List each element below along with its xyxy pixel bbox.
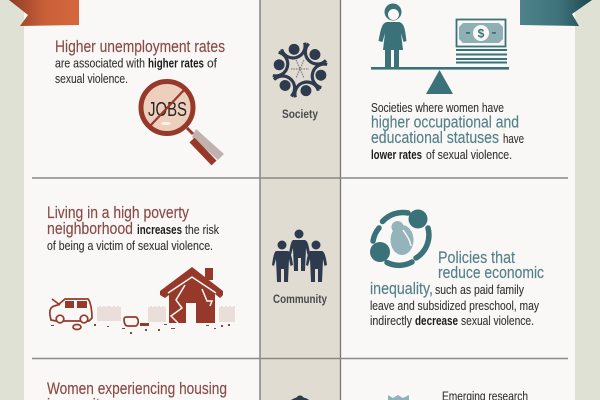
icon: community three people: [272, 230, 327, 282]
text block: economic inequality policies: [370, 248, 544, 328]
text block: poverty neighborhood: Living in a high poverty: [47, 203, 189, 222]
text block: poverty neighborhood: the risk: [185, 223, 220, 237]
panel: centre level column: [260, 0, 340, 400]
text block: poverty neighborhood: increases: [137, 223, 182, 237]
text block: economic inequality policies: Policies that: [438, 248, 515, 267]
icon: teal house crown: [388, 395, 409, 400]
text block: unemployment: of: [207, 56, 217, 70]
text block: occupational statuses: educational statuses: [371, 128, 499, 147]
text block: poverty neighborhood: neighborhood: [47, 219, 133, 238]
icon: woman and money on balance scale: [371, 4, 509, 94]
text block: occupational statuses: Societies where women have: [371, 101, 504, 115]
text block: occupational statuses: [371, 101, 524, 162]
text block: economic inequality policies: inequality,: [370, 279, 433, 298]
text block: occupational statuses: lower rates: [371, 148, 422, 162]
icon: bottom centre figure: [291, 396, 309, 400]
text block: economic inequality policies: such as paid family: [435, 283, 525, 297]
ribbon: orange left: [9, 0, 79, 26]
text block: economic inequality policies: reduce economic: [438, 263, 544, 282]
icon: run-down car, can and cracked house: [50, 267, 234, 334]
text block: unemployment: are associated with: [55, 56, 145, 70]
label: community: Community: [273, 292, 327, 306]
text block: unemployment: Higher unemployment rates: [55, 37, 225, 56]
label: society: Society: [282, 107, 318, 121]
icon: magnifier over crossed-out jobs: JOBS: [148, 99, 187, 121]
text block: unemployment: [55, 37, 225, 86]
text block: economic inequality policies: sexual violence.: [461, 314, 534, 328]
text block: unemployment: higher rates: [148, 56, 204, 70]
ribbon: teal right: [520, 0, 592, 26]
text block: occupational statuses: higher occupational and: [371, 112, 519, 132]
text block: economic inequality policies: indirectly: [370, 314, 413, 328]
text block: economic inequality policies: decrease: [415, 314, 458, 328]
text block: economic inequality policies: leave and subsidized preschool, may: [370, 299, 540, 313]
icon: society circle of people: [271, 41, 329, 99]
text block: poverty neighborhood: of being a victim of sexual violence.: [47, 239, 213, 253]
text block: occupational statuses: of sexual violence.: [426, 148, 512, 162]
text block: unemployment: sexual violence.: [55, 72, 128, 86]
icon: woman and money on balance scale: $: [478, 26, 485, 40]
text block: housing insecurity: Women experiencing housing: [47, 379, 227, 398]
icon: magnifier over crossed-out jobs: [141, 82, 224, 163]
text block: poverty neighborhood: [47, 203, 220, 253]
text block: occupational statuses: have: [503, 132, 524, 146]
icon: parent and child in ring: [370, 210, 429, 265]
